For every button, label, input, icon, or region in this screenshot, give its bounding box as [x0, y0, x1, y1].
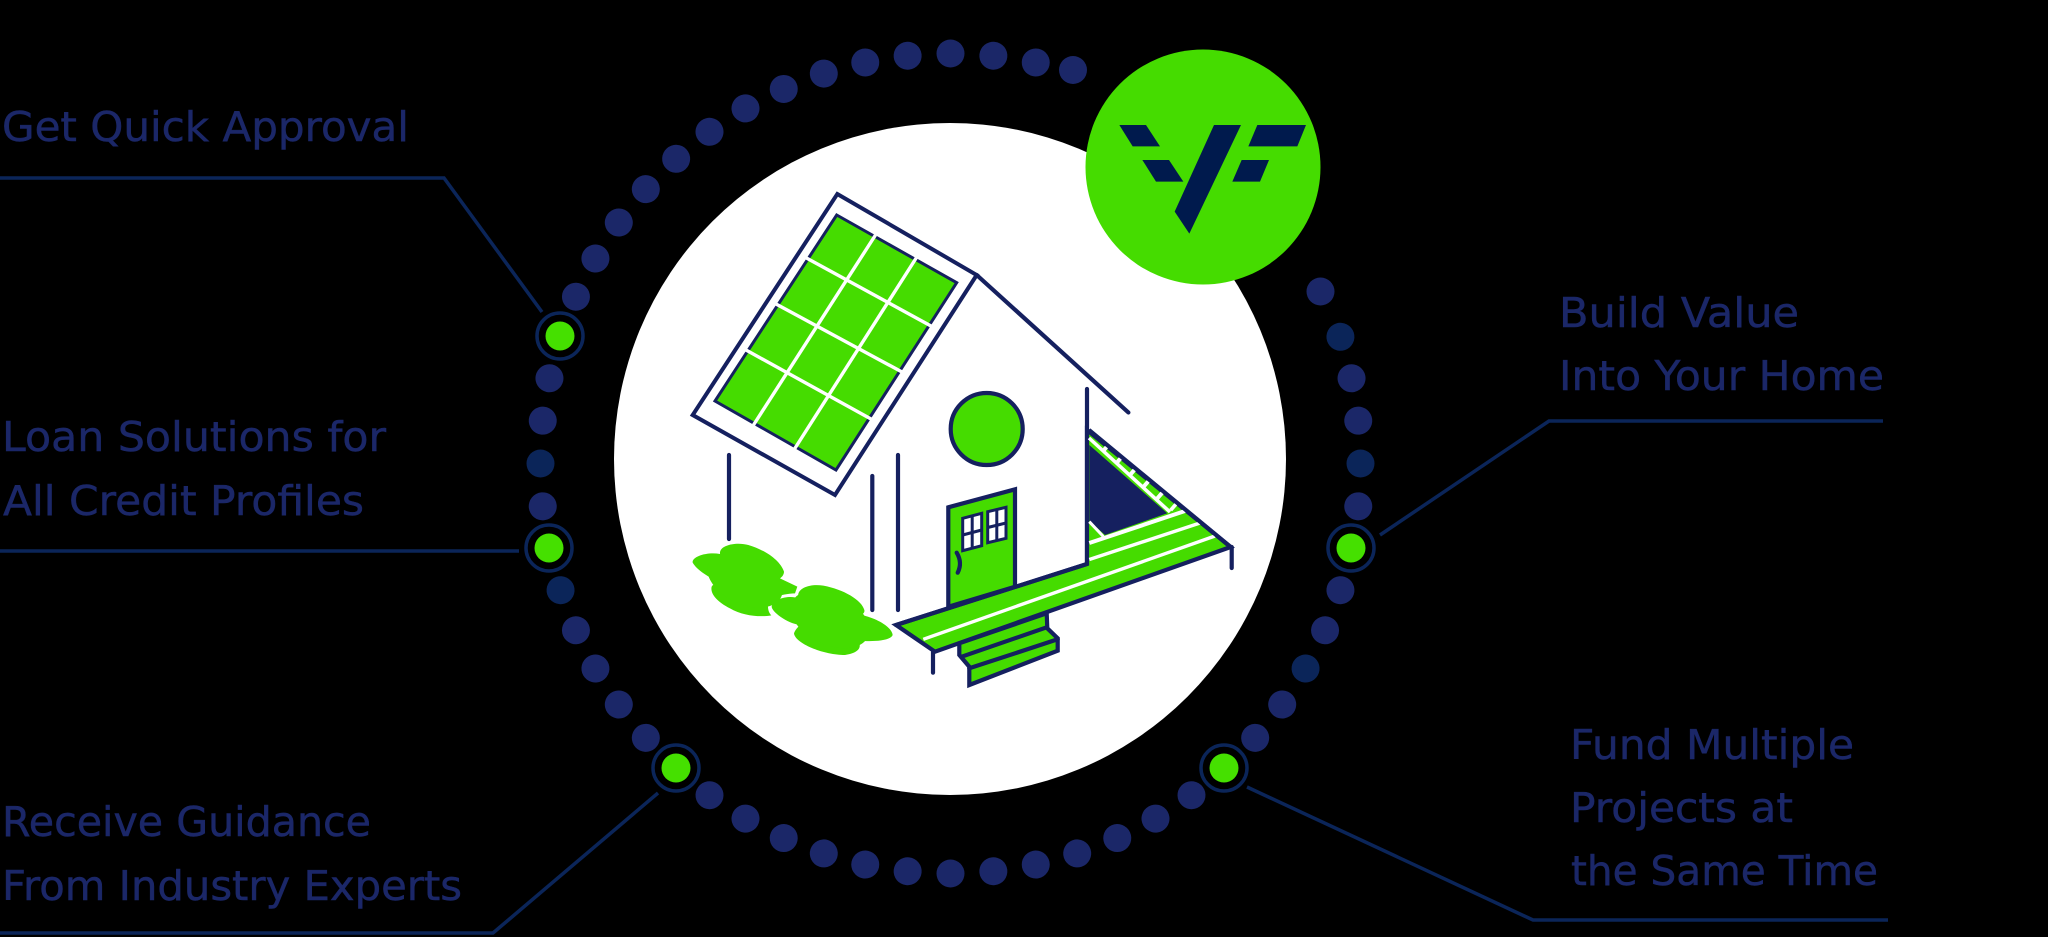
- green marker: credit profiles: [526, 525, 572, 571]
- logo badge: [1086, 50, 1320, 284]
- green marker: build value: [1328, 525, 1374, 571]
- label: Receive Guidance From Industry Experts: From Industry Experts: [2, 862, 462, 910]
- label: Receive Guidance From Industry Experts: [2, 798, 462, 910]
- white center circle: [614, 123, 1286, 795]
- porch posts: [933, 547, 1232, 673]
- wall lines: [729, 389, 1087, 610]
- bushes: [693, 541, 893, 660]
- label: Build Value Into Your Home: Build Value: [1559, 289, 1799, 337]
- green marker: multiple projects: [1201, 745, 1247, 791]
- porch front beam: [896, 564, 1087, 625]
- logo mark: [1119, 125, 1306, 234]
- label: Fund Multiple Projects at the Same Time: Projects at: [1570, 784, 1793, 832]
- label: Fund Multiple Projects at the Same Time: the Same Time: [1571, 847, 1878, 895]
- label: Loan Solutions for All Credit Profiles: All Credit Profiles: [3, 477, 364, 525]
- door: [948, 489, 1015, 607]
- dotted ring: [526, 40, 1374, 888]
- label: Get Quick Approval: Get Quick Approval: [2, 103, 409, 151]
- round window: [951, 393, 1023, 465]
- label: Build Value Into Your Home: [1559, 289, 1884, 400]
- label: Fund Multiple Projects at the Same Time: Fund Multiple: [1570, 721, 1854, 769]
- green marker: guidance: [653, 745, 699, 791]
- connector: multiple projects: [1247, 787, 1888, 920]
- solar panel cells: [715, 215, 957, 470]
- solar panel frame: [693, 194, 977, 495]
- connector: quick approval: [0, 178, 542, 312]
- label: Build Value Into Your Home: Into Your Home: [1559, 352, 1884, 400]
- porch and side deck: [896, 430, 1231, 652]
- green marker: quick approval: [537, 313, 583, 359]
- house illustration: [693, 194, 1232, 685]
- porch steps: [959, 613, 1058, 685]
- label: Receive Guidance From Industry Experts: Receive Guidance: [2, 798, 371, 846]
- connector: credit profiles: [0, 549, 519, 553]
- connector: guidance: [0, 793, 658, 933]
- connector: build value: [1380, 421, 1883, 535]
- label: Fund Multiple Projects at the Same Time: [1570, 721, 1878, 895]
- label: Loan Solutions for All Credit Profiles: Loan Solutions for: [2, 413, 386, 461]
- roof line: [977, 275, 1128, 412]
- label: Loan Solutions for All Credit Profiles: [2, 413, 386, 525]
